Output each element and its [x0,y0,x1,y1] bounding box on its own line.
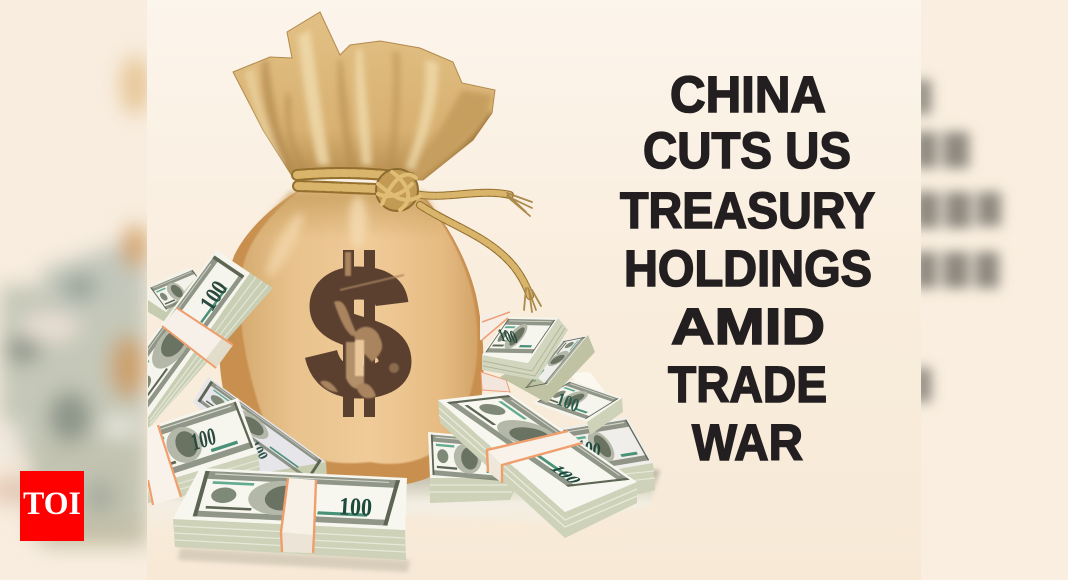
cash stack: right upper rear [500,335,595,403]
cash stack: front right cross [438,392,637,538]
cash stack: right middle: 100 [554,388,582,416]
rope [297,169,541,312]
bag body [219,192,484,487]
cash stack: lilac behind [193,377,327,474]
cash stack: back left small [148,268,197,322]
illustration: money bag and cash [110,12,660,572]
cash stack: front bottom [173,468,407,560]
cash stack: right low [428,432,520,503]
title: AMID [671,298,825,355]
logo: TOI [20,471,84,541]
right blurred side panel [915,0,1068,580]
logo: TOI: TOI [23,486,81,522]
bag top folds [233,12,496,186]
icon: dollar sign [320,250,404,417]
title [620,66,875,471]
cash stack: right middle [533,372,623,435]
title: CHINA [670,66,826,123]
cash stack: left middle: 100 [188,422,218,456]
centre panel [148,0,921,580]
cash stack: front bottom: 100 [338,493,373,522]
title: TREASURY [620,182,875,239]
paper band [162,308,233,368]
floor shadow [148,470,660,572]
money bag [219,12,541,487]
paper band [487,431,582,483]
cash stack: far right: 100 [576,435,602,462]
title: WAR [692,414,803,471]
title: TRADE [668,356,827,413]
cash stack: right upper front: 100 [495,326,521,348]
cash stack: front right cross: 100 [545,464,586,485]
cash stack: upper left: 100 [195,276,233,315]
cash stack: upper left [148,250,273,428]
paper band [148,425,181,505]
cash stack: right upper front [480,312,568,380]
cash stack: far right [560,417,655,494]
paper band [281,478,316,553]
title: HOLDINGS [624,240,872,297]
cash stack: left middle [148,398,260,506]
left blurred side panel [0,0,149,580]
cash stack: lilac behind: 100 [246,438,272,462]
paper band behind right stacks [481,372,510,392]
paper band [480,312,510,340]
title: CUTS US [643,122,851,179]
